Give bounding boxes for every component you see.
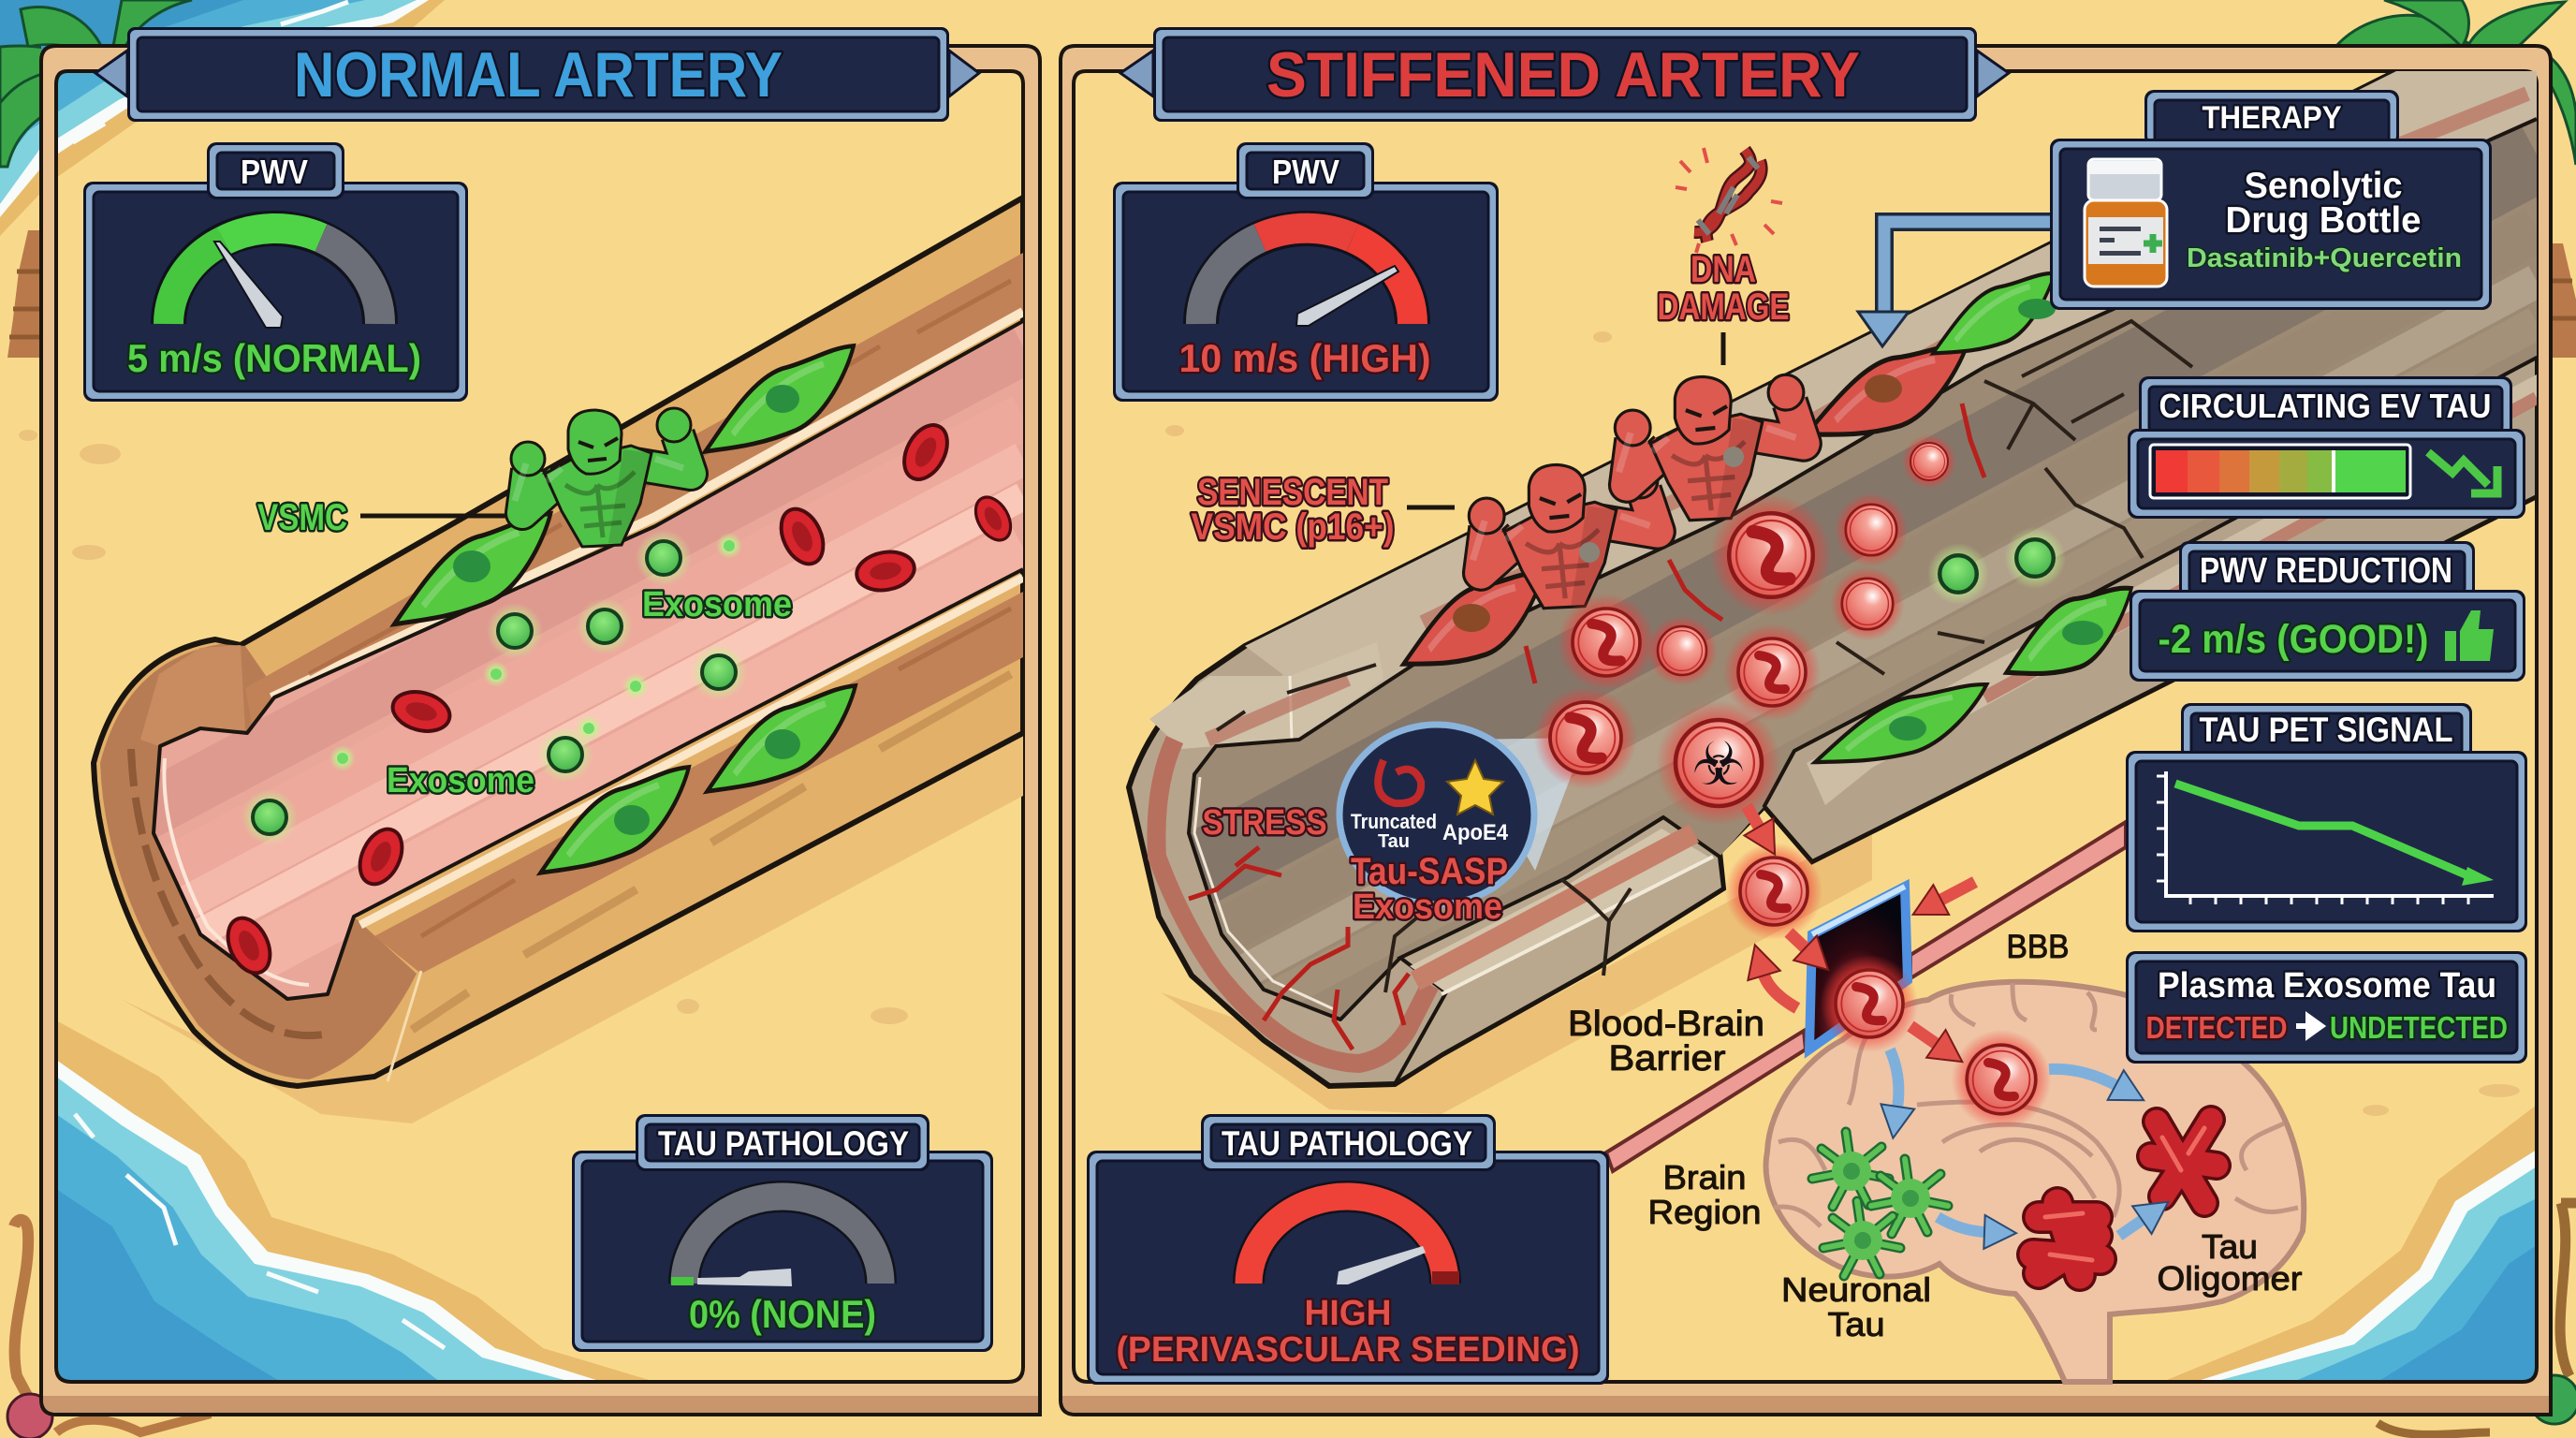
top-left palm <box>0 0 192 167</box>
icon: thumbs up <box>2445 610 2494 661</box>
blood-brain barrier label: Barrier <box>1608 1039 1726 1078</box>
title banner: normal artery: NORMAL ARTERY <box>294 39 783 110</box>
tau oligomer aggregates <box>2033 1120 2217 1275</box>
red cracks <box>1189 404 1984 1049</box>
bottom-right ocean <box>2162 1105 2537 1382</box>
DNA damage icon <box>1676 148 1782 253</box>
panel: plasma exosome tau <box>2126 951 2527 1064</box>
panel: plasma exosome tau: DETECTED <box>2145 1010 2288 1045</box>
exosome crossing BBB <box>1821 955 1918 1052</box>
panel: therapy <box>2050 90 2492 310</box>
senescent VSMC label <box>1191 472 1455 548</box>
senescent VSMC label: SENESCENT <box>1197 472 1388 513</box>
panel: PWV reduction: -2 m/s (GOOD!) <box>2159 617 2428 662</box>
panel: PWV gauge normal <box>83 142 468 402</box>
red SASP exosomes <box>1558 434 1956 721</box>
callout: Tau-SASP exosome: Exosome <box>1353 888 1502 927</box>
panel: PWV gauge stiffened <box>1113 142 1499 402</box>
icon: truncated tau <box>1378 760 1421 803</box>
callout: Tau-SASP exosome <box>1339 725 1534 927</box>
icon: drug bottle <box>2085 159 2167 286</box>
upper wall red stripe <box>1208 94 2527 740</box>
BBB pink barrier wall <box>1606 822 2126 1171</box>
title banner: stiffened artery: STIFFENED ARTERY <box>1266 39 1860 110</box>
callout: Tau-SASP exosome: Tau-SASP <box>1351 851 1508 892</box>
BBB label: BBB <box>2007 929 2069 965</box>
panel: tau PET signal <box>2126 703 2527 932</box>
panel: therapy: Drug Bottle <box>2226 200 2421 241</box>
green exosomes on stiffened side <box>1927 527 2066 605</box>
icon: down trend arrow <box>2428 452 2497 493</box>
panel: tau pathology high: TAU PATHOLOGY <box>1222 1124 1472 1163</box>
panel: PWV gauge stiffened: 10 m/s (HIGH) <box>1179 336 1430 380</box>
panel: plasma exosome tau: Plasma Exosome Tau <box>2158 966 2496 1005</box>
neuronal tau label: Tau <box>1827 1305 1885 1343</box>
title banner: normal artery <box>95 27 979 122</box>
senescent VSMC label: VSMC (p16+) <box>1191 506 1395 548</box>
BBB portal gate <box>1809 887 1908 1049</box>
ground shadow <box>1161 824 1872 1114</box>
blue pathway arrows <box>1890 1049 2144 1236</box>
icon: arrow <box>2296 1017 2321 1035</box>
panel: tau pathology high: (PERIVASCULAR SEEDING) <box>1116 1330 1580 1370</box>
top-left ocean <box>0 0 445 236</box>
panel: tau pathology high: HIGH <box>1305 1294 1391 1333</box>
brain region label: Brain <box>1662 1158 1747 1196</box>
green muscular VSMC figure <box>511 408 691 547</box>
artery outer wall <box>94 198 1023 1086</box>
panel: tau pathology none: 0% (NONE) <box>689 1292 876 1336</box>
panel: therapy: Dasatinib+Quercetin <box>2187 243 2462 273</box>
callout: Tau-SASP exosome: ApoE4 <box>1442 820 1509 845</box>
panel: PWV gauge normal: PWV <box>241 153 308 191</box>
brain region label <box>1647 1158 1762 1231</box>
neuronal tau label <box>1781 1270 1931 1343</box>
stress label: STRESS <box>1202 803 1327 843</box>
panel: tau PET signal: TAU PET SIGNAL <box>2200 711 2452 749</box>
therapy connector arrow <box>1858 222 2050 346</box>
title banner: stiffened artery <box>1120 27 2009 122</box>
lower wall right section <box>1764 358 2537 861</box>
green exosomes <box>242 530 747 845</box>
tau oligomer label: Oligomer <box>2157 1259 2303 1298</box>
panel: therapy: Senolytic <box>2245 166 2402 206</box>
normal artery cutaway <box>94 198 1030 1123</box>
callout spotlight beam <box>1460 738 1586 871</box>
right palm trunk <box>2552 243 2576 358</box>
blood-brain barrier label: Blood-Brain <box>1568 1005 1764 1044</box>
panel: tau pathology high <box>1087 1114 1609 1385</box>
DNA damage label: DNA <box>1690 249 1756 290</box>
line chart <box>2157 771 2494 904</box>
cut block on upper wall <box>1149 676 1299 749</box>
panel: circulating EV tau: CIRCULATING EV TAU <box>2159 387 2492 425</box>
brain <box>1766 982 2304 1382</box>
panel: PWV reduction <box>2130 541 2525 682</box>
cut face ring <box>1156 740 1430 1064</box>
cracks <box>1217 321 2192 992</box>
lower wall muscle band <box>374 592 1023 974</box>
sand speckles <box>19 331 2520 1116</box>
upper wall top surface <box>1245 71 2537 740</box>
VSMC label: VSMC <box>257 497 347 538</box>
neuronal tau cells <box>1812 1132 1948 1276</box>
tau oligomer label: Tau <box>2202 1227 2258 1266</box>
left panel frame <box>41 46 1040 1415</box>
panel: PWV gauge stiffened: PWV <box>1272 153 1339 191</box>
panel: PWV reduction: PWV REDUCTION <box>2200 551 2452 591</box>
artery outer wall <box>1129 71 2537 1086</box>
red blood cells <box>220 418 1017 980</box>
upper wall muscle band <box>245 253 1023 728</box>
corner vines and berries <box>7 1203 2576 1438</box>
exosome label upper: Exosome <box>642 585 792 624</box>
neuronal tau label: Neuronal <box>1781 1270 1931 1309</box>
lumen <box>1170 94 2546 1053</box>
ground shadow <box>121 730 1023 1123</box>
senescent muscular VSMC figures <box>1469 374 1804 609</box>
exosome in brain <box>1952 1030 2051 1129</box>
progress bar <box>2150 445 2410 498</box>
panel: PWV gauge normal: 5 m/s (NORMAL) <box>127 336 421 380</box>
cut face ring <box>100 644 417 1079</box>
left palm trunk <box>7 230 41 358</box>
right panel frame <box>1061 46 2551 1415</box>
blood-brain barrier label <box>1568 1005 1764 1078</box>
bottom-left ocean <box>56 1020 655 1382</box>
red pathway arrows <box>1747 806 1975 1045</box>
panel: tau pathology none <box>572 1114 993 1352</box>
biohazard exosome: ☣ <box>1691 730 1746 800</box>
brain region label: Region <box>1647 1193 1762 1231</box>
stiffened artery cutaway <box>1129 71 2546 1114</box>
callout: Tau-SASP exosome: Tau <box>1378 831 1410 852</box>
panel: therapy: THERAPY <box>2202 100 2342 136</box>
biohazard exosome <box>1656 700 1781 826</box>
panel: plasma exosome tau: UNDETECTED <box>2330 1010 2508 1045</box>
top-right palm <box>2335 0 2576 165</box>
callout: Tau-SASP exosome: Truncated <box>1351 810 1437 833</box>
spindle cells on stiffened artery <box>1392 271 2142 768</box>
panel: circulating EV tau <box>2128 376 2525 519</box>
exosome label lower: Exosome <box>387 761 534 800</box>
icon: ApoE4 star <box>1447 760 1503 814</box>
DNA damage label <box>1657 249 1790 365</box>
tau oligomer label <box>2157 1227 2303 1298</box>
DNA damage label: DAMAGE <box>1657 286 1790 328</box>
panel: tau pathology none: TAU PATHOLOGY <box>658 1124 909 1163</box>
healthy spindle VSMC cells <box>376 345 874 879</box>
escaping exosome <box>1725 843 1822 940</box>
lumen <box>140 318 1030 1016</box>
lower wall block <box>1395 817 1723 1084</box>
lumen outline <box>1189 119 2537 1020</box>
tau exosome near callout <box>1534 686 1637 789</box>
